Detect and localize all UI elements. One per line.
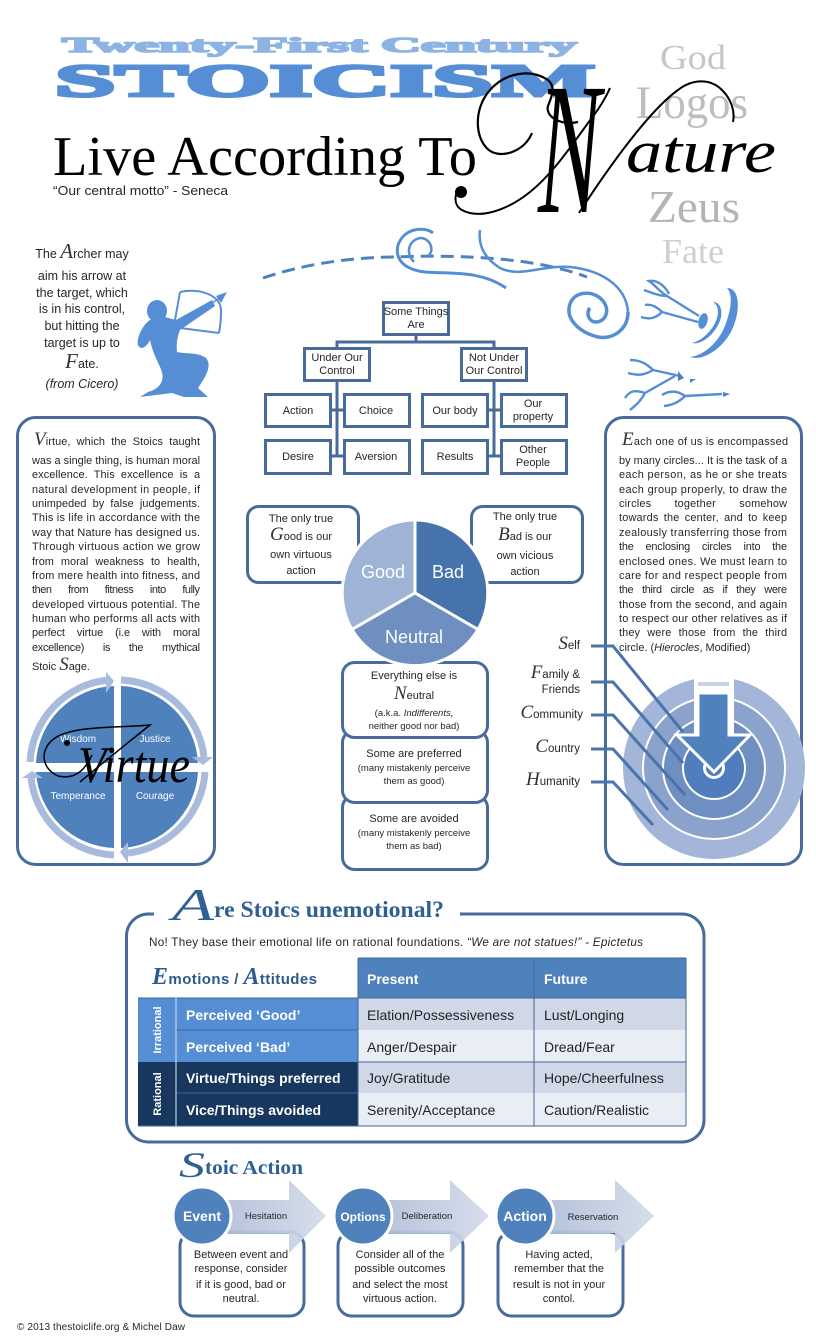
word cloud: names of nature: God (660, 38, 727, 77)
callout: preferred: Some are preferred (366, 748, 462, 760)
table: emotions (138, 958, 686, 1126)
chart: dichotomy of control: Desire (282, 451, 314, 463)
callout: preferred: them as good) (384, 776, 444, 787)
Hierocles text: care for and respect people from (619, 570, 787, 582)
table: emotions: Dread/Fear (544, 1039, 615, 1055)
step: Options: Options (340, 1210, 386, 1224)
chart: dichotomy of control: Results (437, 451, 474, 463)
callout: Bad: Bad is our (498, 524, 552, 545)
labels: circle names: Country (535, 736, 580, 757)
heading: Nature script: ature (626, 119, 776, 185)
virtue text: This is life in accordance with the (32, 512, 200, 524)
archer quote: aim his arrow at (38, 269, 127, 283)
callout: Bad: The only true (493, 511, 557, 523)
table: emotions: Future (544, 971, 588, 987)
leader lines (591, 646, 685, 825)
callout: neutral: Neutral (393, 683, 434, 704)
table: emotions: Caution/Realistic (544, 1102, 649, 1118)
heading (168, 879, 444, 930)
pie chart: good bad neutral (342, 520, 488, 666)
Hierocles text: to respect our other relatives as if (619, 613, 788, 625)
callout: preferred: (many mistakenly perceive (358, 763, 470, 774)
callout: Bad: action (510, 566, 540, 578)
motto attribution: “Our central motto” - Seneca (53, 183, 229, 198)
callout: neutral: neither good nor bad) (369, 721, 459, 732)
callout: neutral (342, 662, 488, 738)
Hierocles text: zealously transferring those from (619, 527, 787, 539)
heading: Nature script: N (537, 46, 606, 254)
chart: dichotomy of control: Are (407, 319, 425, 331)
table: emotions: Emotions / Attitudes (151, 964, 317, 990)
callout: Bad: own vicious (497, 550, 554, 562)
virtue text: developed virtuous potential. The (32, 599, 200, 611)
step: Event (173, 1180, 326, 1316)
table: emotions: Joy/Gratitude (367, 1070, 450, 1086)
chart: dichotomy of control: Under Our (311, 352, 363, 364)
intro sentence: No! They base their emotional life on rational foundations. “We are not statues!” - Epictetus (149, 936, 643, 949)
callout: Good: Good is our (270, 524, 332, 545)
title: STOICISM: STOICISM (55, 55, 595, 106)
chart: dichotomy of control: property (513, 411, 554, 423)
step: Options: and select the most (352, 1279, 448, 1291)
diagram: four virtues cycle: Temperance (50, 791, 106, 802)
Hierocles text: they were those from the third (619, 627, 787, 639)
chart: dichotomy of control: Not Under (469, 352, 519, 364)
table: emotions: Rational (152, 1072, 164, 1116)
Hierocles text: enclosed ones. We must learn to (619, 556, 787, 568)
step: Options: Consider all of the (356, 1249, 444, 1261)
callout: avoided (342, 796, 488, 870)
ornament: swirls (397, 229, 628, 338)
virtue text (31, 429, 201, 675)
step: Action (496, 1180, 654, 1316)
arrow: inward (677, 693, 750, 772)
virtue text: excellence. This excellence is a (32, 469, 201, 481)
virtue text: Virtue, which the Stoics taught (34, 429, 200, 450)
table: emotions: Elation/Possessiveness (367, 1007, 514, 1023)
step: Event: Event (183, 1208, 221, 1224)
table: emotions: Serenity/Acceptance (367, 1102, 496, 1118)
Hierocles text: the enclosing circles into the (619, 541, 787, 553)
chart: dichotomy of control: Choice (359, 405, 393, 417)
diagram: four virtues cycle: Courage (136, 791, 175, 802)
virtue text: from mere health into fitness, and (32, 570, 200, 582)
Hierocles text: each group properly, to draw the (619, 484, 787, 496)
pie chart: good bad neutral: Bad (432, 562, 464, 582)
archer quote: target is up to (44, 336, 120, 350)
step: Event: if it is good, bad or (196, 1279, 286, 1291)
labels: circle names (520, 633, 583, 790)
chart: dichotomy of control: Our (524, 398, 543, 410)
heading: Live According To: Live According To (53, 126, 477, 188)
table: emotions: Perceived ‘Bad’ (186, 1039, 290, 1055)
Hierocles text: the third circle as if they were (619, 584, 787, 596)
script label: Virtue (44, 725, 190, 794)
pie chart: good bad neutral: Neutral (385, 627, 443, 647)
step: Event: neutral. (223, 1293, 259, 1305)
Hierocles text: Each one of us is encompassed (621, 429, 788, 450)
virtue text: natural development in people, if (32, 484, 201, 496)
labels: circle names: Friends (542, 684, 580, 696)
diagram: concentric circles (623, 676, 805, 859)
callout: Good: The only true (269, 513, 333, 525)
archer quote (35, 239, 129, 391)
panel: are Stoics unemotional (126, 879, 704, 1142)
callout: Good (248, 506, 358, 582)
icon: archer silhouette (138, 291, 227, 397)
step: Action: Reservation (568, 1212, 618, 1223)
step: Action: contol. (543, 1293, 575, 1305)
title: Twenty-First Century: Twenty-First Century (62, 33, 578, 57)
Hierocles text: circle. (Hierocles, Modified) (619, 642, 750, 654)
diagram: four virtues cycle: Wisdom (60, 734, 96, 745)
virtue text: was a single thing, is human moral (31, 455, 200, 467)
callout: preferred (342, 730, 488, 802)
labels: circle names: Self (558, 633, 581, 654)
heading: re Stoics unemotional? (214, 897, 444, 922)
callout: neutral: (a.k.a. Indifferents, (375, 708, 453, 719)
chart: dichotomy of control: Our body (432, 405, 478, 417)
step: Options: possible outcomes (354, 1263, 446, 1275)
archer quote: the target, which (36, 286, 128, 300)
archer quote: is in his control, (39, 302, 125, 316)
virtue text: Through virtuous action we grow (32, 541, 200, 553)
table: emotions: Vice/Things avoided (186, 1102, 321, 1118)
step: Action: remember that the (514, 1263, 604, 1275)
panel: virtue (18, 418, 214, 864)
step: Action: result is not in your (513, 1279, 605, 1291)
heading: Stoic Action: toic Action (205, 1157, 303, 1179)
Hierocles text: circles together somehow (619, 498, 787, 510)
chart: dichotomy of control (266, 302, 566, 474)
callout: avoided: them as bad) (386, 841, 442, 852)
heading: Stoic Action: S (179, 1145, 205, 1185)
step: Options: virtuous action. (363, 1293, 437, 1305)
chart: dichotomy of control: Aversion (355, 451, 397, 463)
table: emotions: Anger/Despair (367, 1039, 457, 1055)
labels: circle names: Family & (530, 662, 580, 683)
word cloud: names of nature: Zeus (648, 181, 740, 232)
Hierocles text: those from the second, and again (619, 599, 787, 611)
table: emotions: Lust/Longing (544, 1007, 624, 1023)
virtue text: perfect virtue (i.e with moral (32, 627, 200, 639)
virtue text: unimpeded by false judgements. (32, 498, 200, 510)
chart: dichotomy of control: Control (319, 365, 355, 377)
step: Action: Having acted, (525, 1249, 593, 1261)
archer quote: but hitting the (44, 319, 120, 333)
chart: dichotomy of control: Other (519, 444, 547, 456)
virtue text: from moral weakness to health, (32, 556, 200, 568)
virtue text: Stoic Sage. (32, 654, 90, 675)
callout: Good: own virtuous (270, 549, 332, 561)
table: emotions: Irrational (152, 1006, 164, 1054)
chart: dichotomy of control: Our Control (466, 365, 522, 377)
virtue text: way that Nature has designed us. (31, 527, 200, 539)
table: emotions: Hope/Cheerfulness (544, 1070, 664, 1086)
panel: circles of concern (606, 418, 805, 864)
virtue text: excellence) is the mythical (32, 642, 200, 654)
labels: circle names: Community (520, 702, 583, 723)
callout: avoided: Some are avoided (369, 813, 459, 825)
callout: Bad (472, 506, 582, 582)
step: Action: Action (503, 1208, 547, 1224)
copyright: © 2013 thestoiclife.org & Michel Daw (17, 1322, 186, 1333)
step: Event: Between event and (194, 1249, 288, 1261)
step: Event: Hesitation (245, 1211, 287, 1222)
virtue text: human who performs all acts with (32, 613, 200, 625)
virtue text: then from fitness into fully (32, 584, 201, 596)
heading: Nature script (455, 46, 776, 254)
heading: Stoic Action (179, 1145, 303, 1185)
word cloud: names of nature: Fate (662, 232, 724, 271)
step: Event: response, consider (195, 1263, 288, 1275)
word cloud: names of nature: Logos (636, 77, 748, 129)
Hierocles text: towards the center, and to keep (619, 512, 787, 524)
table: emotions: Perceived ‘Good’ (186, 1007, 300, 1023)
archer quote: Fate. (64, 349, 99, 373)
diagram: four virtues cycle (22, 672, 213, 863)
chart: dichotomy of control: Action (283, 405, 313, 417)
pie chart: good bad neutral: Good (361, 562, 405, 582)
callout: neutral: Everything else is (371, 670, 458, 682)
step: Options (334, 1180, 489, 1316)
table: emotions: Present (367, 971, 419, 987)
Hierocles text: by many circles... It is the task of a (619, 455, 788, 467)
word cloud: names of nature (636, 38, 748, 271)
Hierocles text (619, 429, 788, 654)
script label: Virtue: Virtue (78, 737, 190, 794)
callout: avoided: (many mistakenly perceive (358, 828, 470, 839)
heading: A (168, 879, 215, 930)
archer quote: The Archer may (35, 239, 129, 263)
chart: dichotomy of control: People (516, 457, 550, 469)
icon: target with arrows (625, 281, 738, 410)
labels: circle names: Humanity (525, 769, 580, 790)
Hierocles text: each person, as he or she treats (619, 469, 788, 481)
diagram: four virtues cycle: Justice (139, 734, 171, 745)
callout: Good: action (286, 565, 316, 577)
step: Options: Deliberation (402, 1211, 452, 1222)
ornament: dashed arrow path (263, 256, 587, 278)
archer quote: (from Cicero) (46, 377, 118, 391)
chart: dichotomy of control: Some Things (384, 306, 449, 318)
table: emotions: Virtue/Things preferred (186, 1070, 341, 1086)
